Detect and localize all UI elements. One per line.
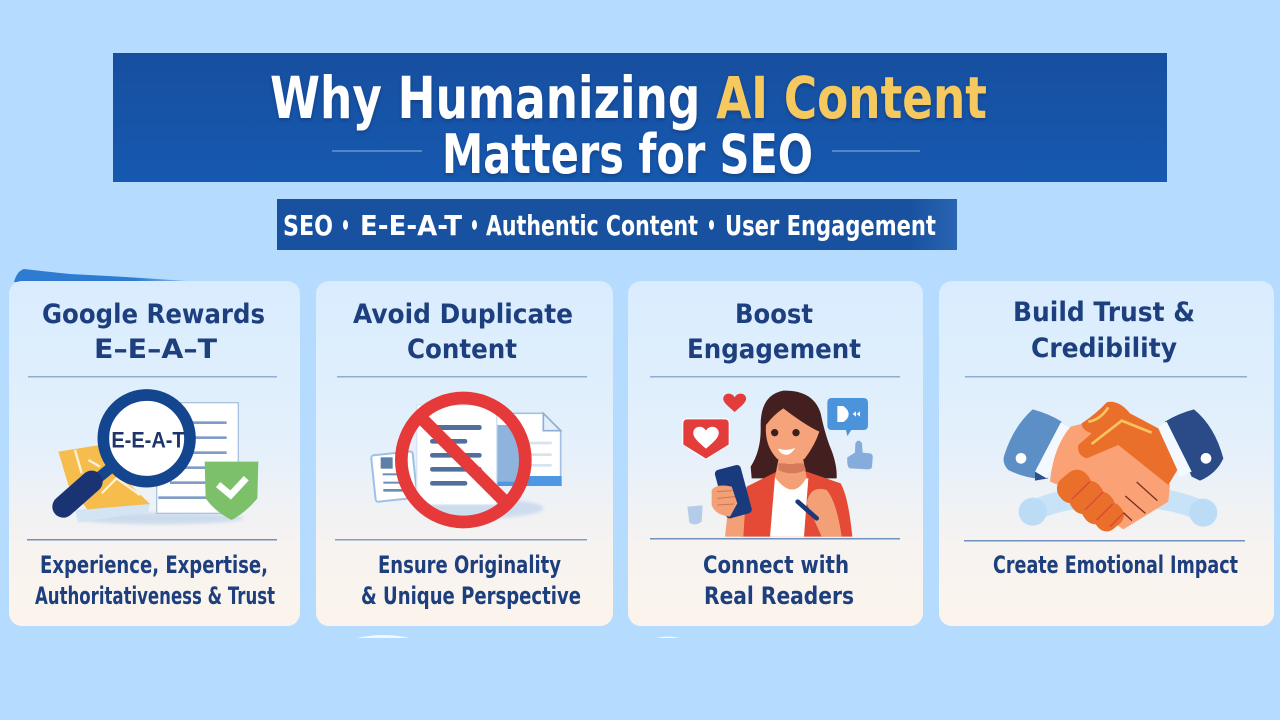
panel: Avoid Duplicate Content [316, 281, 613, 626]
icon: magnifier over document with shield [58, 395, 258, 524]
heading: Engagement [687, 334, 861, 365]
subtitle bar: Authentic Content [486, 209, 698, 242]
heading: Content [407, 334, 517, 365]
icon: magnifier over document with shield: E-E-A-T [111, 428, 185, 453]
panel: Boost Engagement [628, 281, 923, 626]
icon: woman with phone and social reactions [683, 391, 873, 537]
supporting text [703, 551, 854, 610]
decorative sliver above card 1 [14, 269, 188, 282]
icon: heart badge [683, 419, 729, 459]
icon: prohibited duplicate documents [371, 398, 562, 522]
supporting text [35, 551, 275, 610]
icon: handshake [1004, 402, 1223, 536]
subtitle bar: • [341, 209, 350, 242]
heading: Credibility [1031, 333, 1177, 364]
heading [687, 299, 861, 365]
subtitle bar: User Engagement [725, 209, 936, 242]
title text: Matters for SEO [442, 123, 813, 186]
heading [42, 299, 265, 365]
subtitle bar: • [707, 209, 716, 242]
supporting text: Connect with [703, 551, 849, 579]
woman [751, 391, 837, 478]
heading: Avoid Duplicate [353, 299, 573, 330]
title banner [113, 53, 1167, 186]
heading [1013, 297, 1195, 364]
subtitle bar [277, 199, 957, 250]
subtitle bar: SEO [283, 209, 333, 242]
heading: Build Trust & [1013, 297, 1195, 328]
subtitle bar: E-E-A-T [360, 209, 462, 242]
supporting text: Real Readers [704, 582, 854, 610]
icon: small heart [723, 394, 746, 412]
supporting text: Experience, Expertise, [40, 551, 268, 579]
panel: Google Rewards E-E-A-T [9, 281, 300, 626]
supporting text [361, 551, 581, 610]
icon: video bubble [827, 398, 868, 436]
heading: Google Rewards [42, 299, 265, 330]
supporting text: Authoritativeness & Trust [35, 582, 275, 610]
heading [353, 299, 573, 365]
heading: Boost [735, 299, 813, 330]
decorative arcs below cards [357, 635, 680, 638]
supporting text: Ensure Originality [378, 551, 561, 579]
subtitle bar: • [470, 209, 479, 242]
panel: Build Trust & Credibility [939, 281, 1274, 626]
title text [270, 64, 987, 186]
title text: Why Humanizing AI Content [270, 64, 987, 132]
supporting text: & Unique Perspective [361, 582, 581, 610]
icon: thumbs up [847, 441, 873, 469]
heading: E–E–A–T [94, 334, 218, 365]
